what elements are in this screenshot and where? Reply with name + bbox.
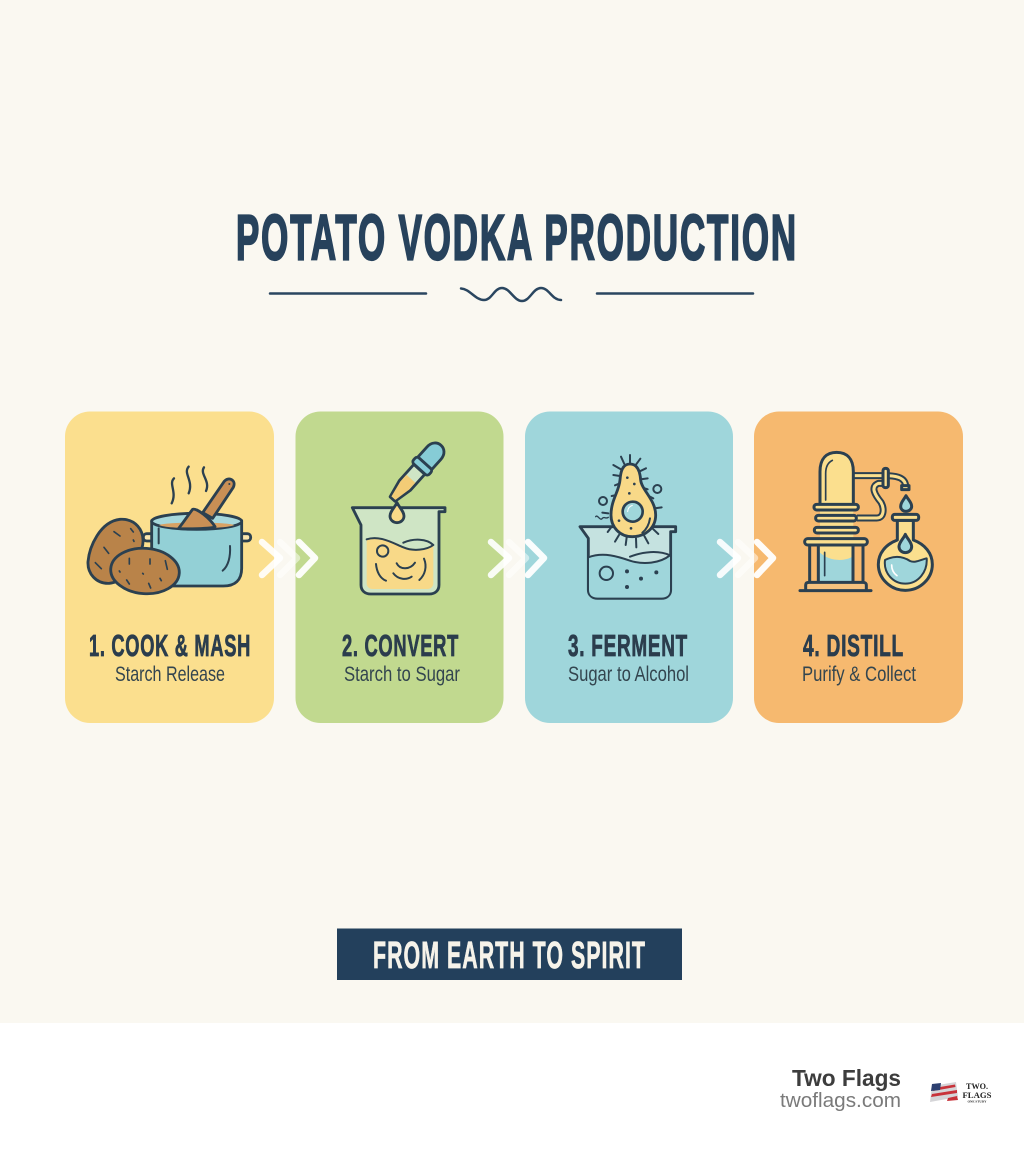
- panel: step 3 ferment: [525, 412, 733, 723]
- icon part: steam: [172, 467, 207, 503]
- logo flag: [930, 1082, 958, 1102]
- icon part: falling drop: [901, 496, 912, 511]
- icon part: base: [806, 582, 866, 590]
- tagline banner: FROM EARTH TO SPIRIT: [373, 935, 646, 977]
- card background: [525, 412, 733, 723]
- icon part: pot handles: [143, 534, 251, 541]
- icon: dropper and beaker: [352, 438, 449, 594]
- tagline banner: [337, 928, 682, 980]
- icon part: flask: [878, 520, 932, 590]
- panel: step 2 convert: [296, 412, 504, 723]
- logo wordmark: [962, 1081, 992, 1104]
- logo wordmark: FLAGS: [962, 1090, 992, 1100]
- step 2 heading: 2. CONVERT: [342, 628, 459, 663]
- icon part: beaker liquid: [367, 538, 433, 589]
- icon part: pot body: [152, 521, 242, 586]
- icon: potatoes and pot: [88, 467, 251, 596]
- arrow: step 3 to 4: [720, 542, 773, 575]
- footer brand name: Two Flags: [792, 1065, 901, 1091]
- title divider with wave: [270, 288, 753, 301]
- card background: [65, 412, 274, 723]
- step 1 subtitle: Starch Release: [115, 663, 225, 686]
- step 3 subtitle: Sugar to Alcohol: [568, 663, 689, 686]
- icon: yeast cell and beaker: [580, 455, 676, 598]
- icon part: beaker: [580, 527, 676, 598]
- icon part: yeast spikes: [602, 455, 662, 547]
- footer brand url: twoflags.com: [780, 1090, 901, 1112]
- step 3 heading: 3. FERMENT: [568, 628, 688, 663]
- icon part: beaker liquid: [589, 554, 670, 598]
- logo wordmark: ONE STUDY: [968, 1100, 987, 1104]
- card background: [754, 412, 963, 723]
- icon part: beaker: [352, 508, 445, 594]
- icon part: dropper: [385, 438, 449, 506]
- step 4 subtitle: Purify & Collect: [802, 663, 916, 686]
- icon part: column rings: [820, 508, 853, 538]
- icon part: column dome: [820, 452, 853, 505]
- icon part: condenser pipes: [853, 476, 906, 487]
- icon part: lower column with liquid: [819, 544, 852, 582]
- icon part: yeast body: [611, 464, 656, 537]
- icon part: falling drop: [390, 503, 404, 523]
- panel: step 1 cook and mash: [65, 412, 274, 723]
- arrow: step 1 to 2: [262, 542, 315, 575]
- logo wordmark: TWO.: [966, 1081, 988, 1091]
- icon part: wooden spoon: [203, 479, 234, 518]
- icon part: bubbles: [596, 485, 661, 519]
- arrow: step 2 to 3: [491, 542, 544, 575]
- icon: distillation apparatus: [800, 452, 932, 591]
- logo: two flags: [930, 1081, 992, 1104]
- icon part: back potato: [88, 519, 143, 583]
- step 4 heading: 4. DISTILL: [803, 628, 904, 663]
- card background: [296, 412, 504, 723]
- step 1 heading: 1. COOK & MASH: [89, 628, 251, 663]
- panel: step 4 distill: [754, 412, 963, 723]
- icon part: front potato: [109, 546, 181, 596]
- step 2 subtitle: Starch to Sugar: [344, 663, 460, 686]
